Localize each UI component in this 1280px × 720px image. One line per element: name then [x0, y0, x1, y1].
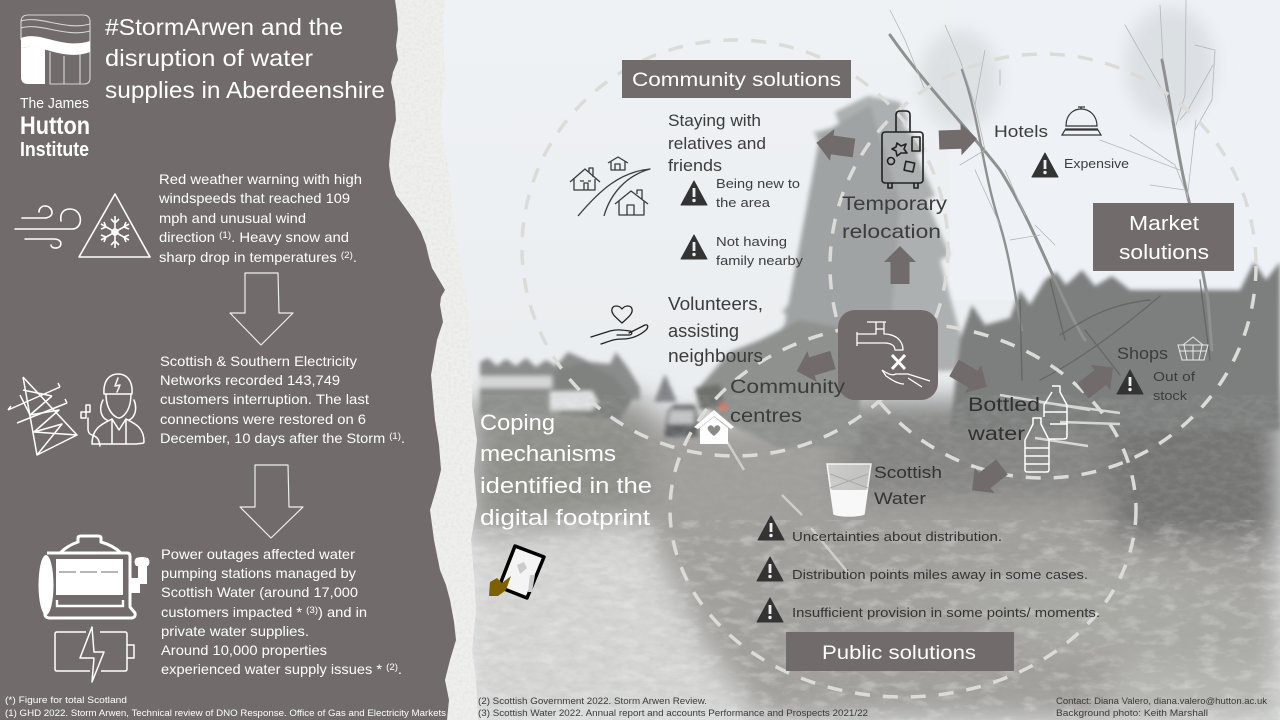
text: community centres: Community — [730, 376, 845, 398]
text: water supply impact: Around 10,000 properties — [161, 643, 327, 658]
footnotes left: (*) Figure for total Scotland — [5, 695, 127, 706]
large conifer — [760, 96, 966, 380]
text: bottled water: water — [967, 423, 1026, 445]
footnotes centre: (2) Scottish Government 2022. Storm Arwen Review. — [478, 696, 707, 707]
text: electricity interruption: December, 10 days after the Storm — [160, 431, 371, 446]
arrow: water to temporary relocation — [884, 246, 916, 284]
text: electricity interruption: customers interruption. The last — [160, 392, 369, 407]
warning: out of stock: stock — [1153, 389, 1188, 403]
footnotes centre — [478, 696, 868, 719]
icon: hotel bell — [1062, 107, 1101, 135]
footnotes left — [5, 695, 446, 719]
text: coping mechanisms heading: mechanisms — [480, 441, 616, 466]
text: staying with relatives and friends: Staying with — [668, 112, 761, 130]
text: water supply impact: experienced water supply issues * — [161, 662, 367, 677]
warning: insufficient provision: Insufficient provision in some points/ moments. — [792, 605, 1100, 620]
crowns of birches — [920, 7, 1215, 130]
text: coping mechanisms heading: identified in the — [480, 473, 652, 498]
icon: glass of water — [827, 464, 871, 516]
text: volunteers assisting neighbours: assisting — [668, 321, 739, 341]
footnotes left: (1) GHD 2022. Storm Arwen, Technical review of DNO Response. Office of Gas and Electricity Markets — [5, 708, 446, 719]
text: water supply impact: pumping stations managed by — [161, 566, 356, 581]
text: electricity interruption: Networks recorded 143,749 — [160, 373, 340, 388]
text: scottish water — [874, 463, 942, 508]
text: temporary relocation — [842, 193, 947, 243]
panel background — [0, 0, 456, 720]
text: water supply impact: Scottish Water (around 17,000 — [161, 585, 358, 600]
text: community centres — [730, 376, 845, 427]
left treeline — [480, 352, 640, 400]
text: coping mechanisms heading — [480, 410, 652, 530]
text: hotels: Hotels — [994, 122, 1048, 141]
heading: market solutions: Market — [1129, 213, 1200, 235]
arrow: suitcase to hotels — [938, 123, 978, 156]
icon: wind — [15, 206, 80, 248]
title: disruption of water — [105, 45, 313, 71]
text: temporary relocation: relocation — [842, 221, 941, 243]
arrow: bottled water to scottish water — [962, 454, 1012, 503]
text: scottish water: Scottish — [874, 463, 942, 482]
logo: James Hutton Institute — [20, 15, 90, 161]
logo: James Hutton Institute: Hutton — [20, 112, 90, 140]
logo: James Hutton Institute: The James — [20, 96, 89, 112]
text: water supply impact: . — [398, 662, 402, 677]
warning: not having family nearby — [681, 235, 804, 268]
torn white paper strip — [380, 0, 478, 720]
text: weather warning: sharp drop in temperatures — [159, 250, 322, 265]
contact and photo credit — [1056, 696, 1267, 719]
text: weather warning — [158, 172, 362, 265]
text: weather warning: Red weather warning with high — [159, 172, 362, 187]
contact and photo credit: Background photo: Keith Marshall — [1056, 708, 1208, 719]
title — [105, 14, 385, 103]
text: weather warning: windspeeds that reached 109 — [158, 191, 350, 206]
text: staying with relatives and friends: friends — [668, 157, 722, 175]
heading: community solutions: Community solutions — [632, 69, 841, 91]
text: electricity interruption: (1) — [389, 431, 401, 441]
warning: out of stock — [1117, 370, 1196, 403]
text: water supply impact: ) and in — [318, 605, 367, 620]
heading: public solutions: Public solutions — [822, 642, 976, 664]
heading: public solutions — [786, 632, 1014, 671]
text: community centres: centres — [730, 405, 802, 427]
icon: houses and road — [570, 157, 650, 216]
text: shops: Shops — [1117, 344, 1168, 363]
heading: community solutions — [622, 60, 851, 98]
text: weather warning: . Heavy snow and — [231, 230, 349, 245]
icon: battery with lightning bolt — [55, 627, 134, 682]
warning: being new to the area: Being new to — [716, 177, 800, 191]
text: water supply impact: Power outages affected water — [161, 547, 356, 562]
text: bottled water: Bottled — [968, 394, 1040, 416]
text: weather warning: direction — [159, 230, 210, 245]
arrow: water to bottled water — [946, 354, 995, 401]
warning: insufficient provision — [757, 598, 1100, 622]
right forest — [950, 262, 1280, 430]
ground texture — [470, 395, 1280, 720]
dashed ring: public solutions — [670, 323, 1136, 697]
arrow: electricity to water — [240, 465, 303, 538]
text: bottled water — [967, 394, 1040, 445]
text: water supply impact: private water supplies. — [161, 624, 309, 639]
text: weather warning: . — [353, 250, 357, 265]
warning: uncertainties about distribution — [758, 516, 1002, 544]
icon: water pump generator — [38, 536, 150, 618]
title: #StormArwen and the — [105, 14, 343, 40]
text: volunteers assisting neighbours: neighbours — [668, 346, 763, 366]
dashed ring: market solutions — [830, 54, 1256, 478]
heading: market solutions: solutions — [1119, 242, 1209, 264]
text: staying with relatives and friends: relatives and — [668, 135, 766, 153]
text: scottish water: Water — [874, 489, 926, 508]
text: coping mechanisms heading: digital footprint — [480, 505, 650, 530]
warning: expensive — [1032, 153, 1129, 177]
contact and photo credit: Contact: Diana Valero, diana.valero@hutton.ac.uk — [1056, 696, 1267, 707]
text: electricity interruption: connections were restored on 6 — [160, 412, 366, 427]
warning: uncertainties about distribution: Uncertainties about distribution. — [792, 529, 1002, 544]
logo: James Hutton Institute: Institute — [20, 139, 89, 161]
right roadside trees — [695, 320, 860, 448]
text: water supply impact: (3) — [306, 605, 318, 615]
warning: being new to the area — [681, 177, 800, 210]
dashed ring: community solutions — [522, 40, 948, 456]
text: water supply impact: (2) — [386, 662, 398, 672]
warning: not having family nearby: family nearby — [716, 254, 804, 268]
text: weather warning: mph and unusual wind — [159, 211, 306, 226]
text: staying with relatives and friends — [668, 112, 766, 175]
text: electricity interruption — [160, 354, 405, 446]
text: temporary relocation: Temporary — [842, 193, 947, 215]
text: weather warning: (1) — [219, 230, 231, 240]
text: water supply impact — [161, 547, 402, 677]
icon: house with heart — [694, 410, 734, 444]
arrow: water to community centres — [792, 345, 838, 386]
text: water supply impact: customers impacted * — [161, 605, 292, 620]
text: volunteers assisting neighbours: Volunteers, — [668, 294, 763, 314]
icon: suitcase — [882, 111, 923, 188]
central icon: tap and hand — [838, 310, 938, 400]
warning: expensive: Expensive — [1064, 157, 1129, 171]
warning: being new to the area: the area — [716, 196, 770, 210]
icon: heart in hand — [591, 306, 648, 344]
warning: distribution points miles away — [757, 557, 1088, 582]
icon: snow warning triangle — [79, 194, 150, 257]
car and excavator — [664, 405, 698, 437]
warning: out of stock: Out of — [1153, 370, 1196, 384]
arrow: suitcase to staying with relatives — [814, 127, 856, 164]
heading: market solutions — [1093, 203, 1234, 271]
text: electricity interruption: . — [401, 431, 405, 446]
text: coping mechanisms heading: Coping — [480, 410, 555, 435]
warning: not having family nearby: Not having — [716, 235, 787, 249]
text: weather warning: (2) — [341, 250, 353, 260]
icon: water bottles — [1025, 386, 1067, 472]
footnotes centre: (3) Scottish Water 2022. Annual report and accounts Performance and Prospects 2021/22 — [478, 708, 868, 719]
warning: distribution points miles away: Distribution points miles away in some cases. — [792, 567, 1088, 582]
icon: hand holding social media tablet — [489, 546, 544, 598]
arrow: bottled water to shops — [1073, 355, 1123, 404]
arrow: weather to electricity — [230, 273, 293, 345]
icon: shopping basket — [1178, 337, 1208, 360]
icon: electrician worker — [81, 374, 144, 446]
text: volunteers assisting neighbours — [668, 294, 763, 366]
icon: electricity pylon — [8, 377, 77, 455]
panel: storm timeline — [0, 0, 456, 720]
title: supplies in Aberdeenshire — [105, 77, 385, 103]
text: electricity interruption: Scottish & Southern Electricity — [160, 354, 357, 369]
